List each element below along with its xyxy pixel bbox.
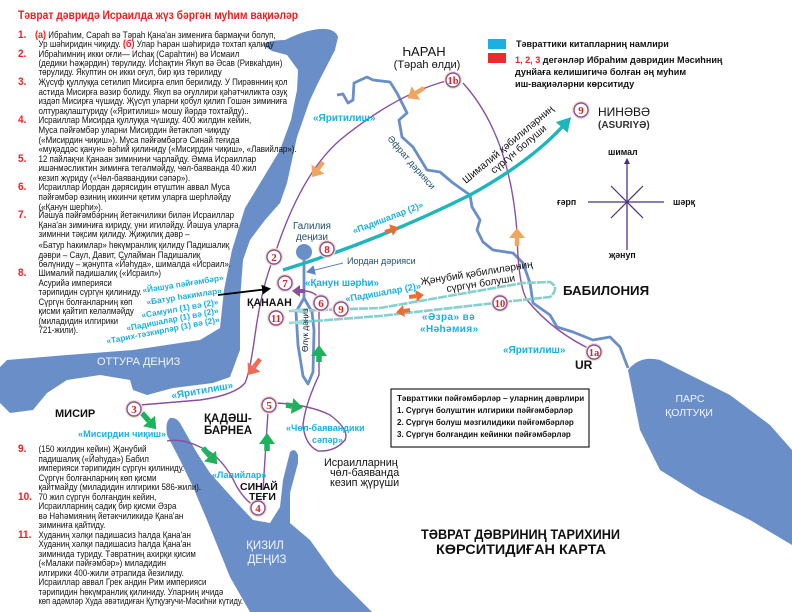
text block: events 9 to 11: қайтмайду (миладидин илгирики 586-жили). bbox=[39, 482, 201, 492]
arrow: green wilderness Sinai bbox=[203, 448, 210, 456]
route: Moab to Canaan bbox=[300, 291, 318, 297]
label: Red Sea: ҚИЗИЛ bbox=[246, 540, 284, 552]
legend bbox=[488, 39, 723, 89]
text block: events 1 to 8: (а) Ибраһим, Сараһ вә Тәраһ Қана'ан зимениға бармақчи болуп, bbox=[35, 30, 276, 41]
text block: events 1 to 8: Сүргүн болғанларниң көп bbox=[39, 297, 132, 307]
prophets box: 3. Сүргүн болғандин кейинки пәйғәмбәрләр bbox=[397, 430, 571, 439]
marker 4 bbox=[249, 499, 267, 517]
marker 6: 6 bbox=[318, 298, 324, 310]
text block: events 1 to 8: Исраиллар Иордан дәрясидин өтүштин аввал Муса bbox=[39, 182, 230, 192]
label: Deuteronomy: «Қанун шәрһи» bbox=[305, 278, 379, 289]
arrow: green up Moab bbox=[316, 356, 322, 362]
book labels: Joshua to Chronicles: «Падишалар (1) вә (2)» bbox=[125, 305, 220, 333]
label: Haran: ҺАРАН bbox=[402, 44, 446, 59]
label: Persian Gulf: ҚОЛТУҚИ bbox=[665, 407, 713, 419]
book labels: Joshua to Chronicles: «Тарих-тәзкирләр (1) вә (2)» bbox=[105, 314, 221, 346]
text block: events 1 to 8: Муса пәйғәмбәр уларни Мисирдин йетәкләп чиқиду bbox=[39, 125, 231, 135]
prophets box: 1. Сүргүн болуштин илгирики пәйғәмбәрләр bbox=[397, 406, 573, 415]
label: Numbers: сәпәр» bbox=[312, 435, 343, 445]
text block: events 1 to 8: дәври – Саул, Давит, Сулайман Падишалиқ bbox=[39, 250, 201, 260]
arrow: Jordan pointer bbox=[307, 263, 343, 272]
arrow: black to Canaan bbox=[218, 289, 268, 295]
text block: events 1 to 8: 3. bbox=[18, 76, 26, 88]
label: Egypt: МИСИР bbox=[55, 408, 95, 420]
arrow: northern kings bbox=[385, 230, 391, 232]
marker 4: 4 bbox=[255, 503, 261, 515]
label: Dead Sea: Өлүк дәңиз bbox=[300, 308, 310, 352]
text block: events 1 to 8: ишәнмәсликтин зиминға тегәлмәйду, чөл-баяванда 40 жил bbox=[39, 163, 257, 173]
sea: Persian Gulf bbox=[628, 359, 792, 545]
text block: events 9 to 11: вә Нәһәмияниң йетәкчиликидә Қана'ан bbox=[39, 511, 184, 521]
route: Haran to Ur bbox=[463, 83, 594, 351]
title: timeline heading: Тәврат дәвридә Исраилда жүз бәргән муһим вақиәләр bbox=[18, 8, 298, 22]
text block: events 1 to 8: Җүсүф қуллуққа сетилип Мисирға елип берилиду. У Пирәвнниң қол bbox=[39, 77, 288, 87]
label: Galilee bbox=[293, 221, 331, 243]
text block: events 1 to 8: 12 пайлақчи Қанаан зиминини чарлайду. Әмма Исраиллар bbox=[39, 154, 256, 164]
label: Red Sea bbox=[246, 540, 287, 566]
route: Egypt to Sinai bbox=[167, 440, 253, 505]
text block: events 9 to 11: Исраилларниң садиқ бир қисми Әзра bbox=[39, 501, 177, 511]
text block: events 1 to 8: («Қанун шерһи»). bbox=[39, 202, 103, 212]
sea: Red Sea bbox=[166, 418, 372, 612]
text block: events 9 to 11: 9. bbox=[18, 443, 26, 455]
label: northern exile: сүргүн болуши bbox=[488, 123, 549, 176]
label: Ur: UR bbox=[575, 358, 593, 372]
text block: events 1 to 8: тәрипидин сүргүн қилиниду. bbox=[39, 287, 142, 297]
arrow: orange north from Ur bbox=[515, 238, 519, 246]
arrow: southern kings bbox=[409, 296, 416, 297]
marker 1a: 1a bbox=[589, 348, 600, 359]
marker 9 Nineveh: 9 bbox=[578, 105, 584, 117]
marker 7: 7 bbox=[282, 278, 288, 290]
text block: events 1 to 8: бөлүниду – җәнупта «Йәһуда», шималда «Исраил». bbox=[39, 258, 231, 269]
marker 10: 10 bbox=[495, 299, 505, 310]
route: Haran to Egypt bbox=[140, 81, 446, 405]
label: Exodus: «Мисирдин чиқиш» bbox=[78, 429, 166, 439]
book labels: Joshua to Chronicles bbox=[105, 271, 224, 346]
sea: Mediterranean bbox=[0, 29, 338, 413]
map title: КӨРСИТИДИҒАН КАРТА bbox=[436, 541, 606, 557]
arrow: salmon to Egypt bbox=[254, 359, 260, 367]
river: Euphrates bbox=[337, 77, 628, 368]
label: Kings upper: «Падишалар (2)» bbox=[351, 200, 425, 236]
marker 11: 11 bbox=[271, 314, 281, 325]
label: Red Sea: ДЕҢИЗ bbox=[248, 554, 287, 566]
label: Nineveh bbox=[598, 105, 650, 131]
text block: events 9 to 11: Сүргүн болғанларниң көп қисми bbox=[39, 473, 157, 483]
marker 5: 5 bbox=[266, 400, 272, 412]
label: southern exile: сүргүн болуши bbox=[446, 272, 516, 295]
prophets box bbox=[391, 389, 589, 447]
marker 10 bbox=[491, 294, 509, 312]
compass: шимал bbox=[608, 147, 638, 157]
text block: events 1 to 8: астида Мисирға вәзир болиду. Якуп вә оғуллири қәһәтчиликтә озуқ bbox=[39, 87, 287, 97]
route: wilderness wandering bbox=[277, 311, 346, 451]
book labels: Joshua to Chronicles: «Батур һакимлар» bbox=[146, 285, 223, 307]
arrow: orange from Haran bbox=[416, 88, 424, 93]
marker 9 south: 9 bbox=[338, 304, 344, 316]
text block: events 1 to 8: 721-жили). bbox=[39, 325, 78, 335]
label: Nineveh: НИНӘВӘ bbox=[598, 105, 650, 119]
text block: events 1 to 8: Қана'ан зиминиға кириду, уни игиләйду. Йәшуа уларға bbox=[39, 219, 239, 230]
label: wandering: кезип җүрүши bbox=[330, 477, 399, 489]
legend: Тәвраттики китапларниң намлири bbox=[516, 39, 669, 49]
marker 1a bbox=[585, 343, 603, 361]
marker 1b bbox=[444, 71, 462, 89]
text block: events 1 to 8: төрулиду. Якуптин он икки оғул, бир қиз төрилиду bbox=[39, 67, 222, 77]
label: wandering: чөл-баяванда bbox=[330, 467, 399, 479]
route: Sinai to Kadesh bbox=[263, 412, 268, 490]
compass: җәнуп bbox=[608, 250, 636, 260]
marker 8 bbox=[318, 240, 336, 258]
marker 3 bbox=[125, 400, 143, 418]
compass bbox=[557, 147, 696, 260]
arrow: return from exile bbox=[404, 310, 410, 311]
marker 5 bbox=[260, 396, 278, 414]
text block: events 1 to 8: 7. bbox=[18, 209, 26, 221]
label: Ezra and Nehemiah: «Нәһәмия» bbox=[420, 323, 479, 335]
text block: events 1 to 8: Исраиллар Мисирда қуллуққа чүшиду. 400 жилдин кейин, bbox=[39, 115, 251, 125]
text block: events 9 to 11: зиминиға қайтиду. bbox=[39, 520, 105, 530]
label: Kadesh Barnea: ҚАДӘШ- bbox=[204, 413, 252, 425]
marker 9 Nineveh bbox=[572, 101, 590, 119]
text block: events 9 to 11: Худаниң хәлқи падишасиз һалда Қана'ан bbox=[39, 539, 191, 549]
text block: events 1 to 8: Йәшуа пәйғәмбәрниң йетәкчилики билән Исраиллар bbox=[39, 209, 234, 220]
label: Genesis lower: «Яритилиш» bbox=[503, 345, 566, 356]
marker 2 bbox=[265, 248, 283, 266]
text block: events 1 to 8: 2. bbox=[18, 48, 26, 60]
prophets box: Тәвраттики пәйғәмбәрләр – уларниң дәврлири bbox=[397, 394, 584, 403]
label: Persian Gulf bbox=[665, 393, 713, 419]
book labels: Joshua to Chronicles: «Самуил (1) вә (2)» bbox=[141, 297, 219, 320]
line: northern exile bbox=[283, 126, 563, 270]
text block: events 1 to 8: қисми қайтип келәлмәйду bbox=[39, 306, 135, 316]
arrow: purple to Canaan bbox=[295, 289, 305, 293]
text block: events 1 to 8: Ибраһимниң икки оғли— Исһақ (Сараһтин) вә Исмаил bbox=[39, 49, 239, 59]
text block: events 9 to 11: илгирики 400-жили әтрапида йезилиду. bbox=[39, 568, 184, 578]
label: Numbers: «Чөл-баявандики bbox=[286, 423, 364, 433]
label: Kings lower: «Падишалар (2)» bbox=[345, 281, 422, 304]
map title bbox=[421, 526, 620, 557]
legend: 1, 2, 3 дегәнләр Ибраһим дәвридин Мәсиһниң bbox=[515, 55, 723, 65]
text block: events 1 to 8: (миладидин илгирики bbox=[39, 316, 118, 326]
text block: events 1 to 8: Асурийә империяси bbox=[39, 278, 112, 288]
label: wandering: Исраилларниң bbox=[324, 457, 398, 469]
marker 6 bbox=[312, 294, 330, 312]
arrow: green up Sinai bbox=[264, 444, 270, 451]
text block: events 1 to 8: «Батур һакимлар» һөкүмранлиқ қилиду Падишалиқ bbox=[39, 240, 230, 250]
text block: events 1 to 8 bbox=[18, 29, 297, 335]
label: Kadesh Barnea bbox=[204, 413, 252, 437]
text block: events 1 to 8: олтурақлаштуриду («Яритилиш» мошу йәрдә тохтайду).. bbox=[39, 106, 249, 116]
label: Jordan: Иордан дәрияси bbox=[347, 256, 416, 266]
text block: events 9 to 11: 70 жил сүргүн болғандин кейин, bbox=[39, 492, 156, 502]
text block: events 1 to 8: 1. bbox=[18, 29, 26, 41]
text block: events 1 to 8: пәйғәмбәр өзиниң иккинчи қетим уларға шерһләйду bbox=[39, 192, 232, 202]
text block: events 1 to 8: 5. bbox=[18, 153, 26, 165]
marker 2: 2 bbox=[271, 252, 277, 264]
label: Ezra and Nehemiah bbox=[420, 312, 479, 335]
arrow: orange to Canaan bbox=[318, 162, 323, 169]
label: Mount Sinai bbox=[240, 480, 278, 503]
text block: events 9 to 11: тәрипидин һөкүмранлиқ қилиниду. Уларниң ичидә bbox=[39, 587, 224, 597]
text block: events 1 to 8: кезип жүриду («Чөл-баявандики сәпәр»). bbox=[39, 173, 190, 183]
label: Leviticus: «Лавийлар» bbox=[212, 470, 266, 480]
prophets box: 2. Сүргүн болуш мәзгилидики пәйғәмбәрләр bbox=[397, 418, 574, 427]
marker 1b: 1b bbox=[447, 76, 459, 87]
marker 8: 8 bbox=[324, 244, 330, 256]
label: Babylonia: БАБИЛОНИЯ bbox=[563, 283, 649, 298]
label: southern exile: Җәнубий қәбилиләрниң bbox=[420, 258, 534, 288]
text block: events 9 to 11: империяси тәрипидин сүргүн қилиниду. bbox=[39, 463, 184, 473]
label: Mediterranean: ОТТУРА ДЕҢИЗ bbox=[97, 356, 181, 368]
text block: events 1 to 8: 8. bbox=[18, 267, 26, 279]
label: Galilee: Галилия bbox=[293, 221, 331, 232]
legend: дунйаға келишигичә болған әң муһим bbox=[515, 67, 686, 77]
compass: шәрқ bbox=[673, 197, 696, 207]
label: Canaan: ҚАНААН bbox=[247, 297, 292, 309]
label: Mount Sinai: СИНАЙ bbox=[240, 480, 278, 493]
text block: events 1 to 8: Ур шәһиридин чиқиду. (б) Улар Һаран шәһиридә тохтап қалиду bbox=[39, 39, 275, 50]
label: Genesis Egypt: «Яритилиш» bbox=[171, 380, 234, 402]
label: Kadesh Barnea: БАРНЕА bbox=[204, 425, 252, 437]
label: Haran bbox=[394, 44, 460, 71]
text block: events 9 to 11 bbox=[18, 443, 243, 606]
text block: events 9 to 11: зиминида туриду. Тәвратниң ахирқи қисим bbox=[39, 549, 196, 559]
marker 3: 3 bbox=[131, 404, 137, 416]
legend: иш-вақиәләрни көрситиду bbox=[515, 79, 635, 89]
text block: events 9 to 11: Исраиллар аввал Грек андин Рим империяси bbox=[39, 577, 207, 587]
text block: events 1 to 8: (дедики Һәҗәрдин) төрулиду. Исһақтин Якуп вә Әсав (Ривкаһдин) bbox=[39, 58, 283, 68]
text block: events 1 to 8: Шималий падишалиқ («Исраил») bbox=[39, 268, 161, 278]
label: Euphrates: Әфрат дәрияси bbox=[385, 134, 437, 191]
label: Haran: (Тәраһ өлди) bbox=[394, 59, 460, 71]
arrow: green Egypt bbox=[142, 413, 149, 421]
text block: events 1 to 8: зиминни тәқсим қилиду. Җиҗилиқ дәвр – bbox=[39, 229, 190, 239]
marker 9 south bbox=[332, 300, 350, 318]
label: Genesis upper: «Яритилиш» bbox=[313, 113, 376, 124]
text block: events 1 to 8: («Мисирдин чиқиш»). Муса пәйғәмбәргә Синай теғида bbox=[39, 135, 240, 145]
text block: events 1 to 8: издәп Мисирға чүшиду. Җүсүп уларни қобул қилип Гошән зиминиға bbox=[39, 96, 287, 106]
label: Numbers bbox=[286, 423, 364, 445]
arrow: green to wilderness bbox=[286, 405, 292, 406]
label: Nineveh: (ASURIYƏ) bbox=[598, 120, 650, 131]
text block: events 1 to 8: 6. bbox=[18, 181, 26, 193]
compass: ғәрп bbox=[557, 197, 576, 207]
text block: events 9 to 11: Худаниң хәлқи падишасиз һалда Қана'ан bbox=[39, 530, 191, 540]
label: wandering bbox=[324, 457, 399, 489]
text block: events 9 to 11: 11. bbox=[18, 529, 31, 541]
book labels: Joshua to Chronicles: «Йәшуа пәйғәмбәр» bbox=[142, 271, 224, 295]
label: northern exile: Шималий қәбилиләрниң bbox=[460, 103, 557, 186]
text block: events 9 to 11: көп адәмләр Худа әвәтидиған Қутқузғучи-Мәсиһни күтиду. bbox=[39, 596, 243, 606]
text block: events 9 to 11: («Малаки пәйғәмбәр») миладидин bbox=[39, 558, 166, 568]
marker 11 bbox=[267, 309, 285, 327]
map title: ТӘВРАТ ДӘВРИНИҢ ТАРИХИНИ bbox=[421, 526, 620, 542]
label: Persian Gulf: ПАРС bbox=[675, 393, 705, 405]
text block: events 1 to 8: 4. bbox=[18, 114, 26, 126]
line: southern exile loop bbox=[287, 282, 555, 325]
label: Ezra and Nehemiah: «Әзра» вә bbox=[422, 312, 475, 323]
marker 7 bbox=[276, 274, 294, 292]
text block: events 1 to 8: «муқәддәс қанун» вәһий қилиниду («Мисирдин чиқиш», «Лавийлар»). bbox=[39, 144, 297, 154]
label: Mount Sinai: ТЕҒИ bbox=[249, 491, 276, 503]
label: Galilee: деңизи bbox=[296, 232, 328, 243]
text block: events 9 to 11: (150 жилдин кейин) Җәнубий bbox=[39, 444, 147, 454]
text block: events 9 to 11: падишалиқ («Йәһуда») Бабил bbox=[39, 453, 149, 464]
Sea of Galilee and Jordan river with Dead Sea bbox=[296, 244, 314, 384]
text block: events 9 to 11: 10. bbox=[18, 491, 32, 503]
